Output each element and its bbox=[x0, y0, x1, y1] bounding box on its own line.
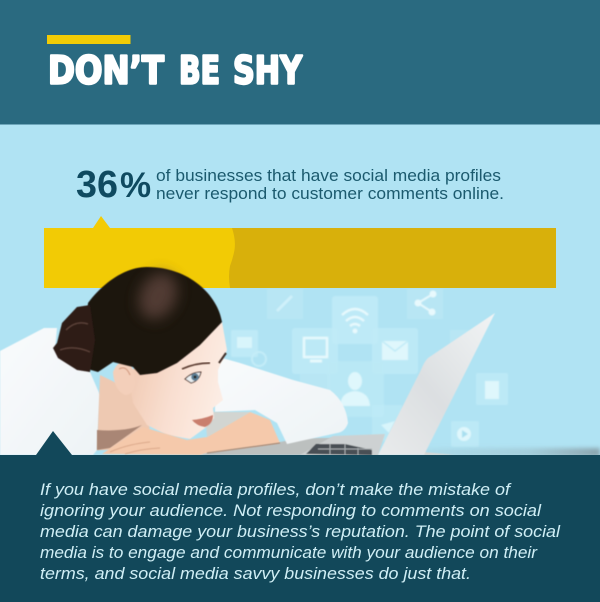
icon: monitor bbox=[292, 328, 338, 374]
icon: mail bbox=[372, 328, 418, 374]
title: BE bbox=[179, 48, 220, 92]
photo: laptop bbox=[300, 313, 495, 455]
stat description bbox=[156, 167, 504, 203]
accent bar bbox=[47, 35, 130, 44]
laptop keyboard bbox=[306, 444, 372, 455]
eye bbox=[185, 353, 226, 383]
body text: terms, and social media savvy businesses do just that. bbox=[40, 565, 471, 583]
icon: person bbox=[327, 361, 384, 417]
body text: ignoring your audience. Not responding to comments on social bbox=[40, 502, 542, 520]
bar fill 36% bbox=[44, 216, 235, 288]
laptop screen bbox=[378, 313, 495, 455]
body text: media is to engage and communicate with your audience on their bbox=[40, 544, 539, 562]
icon: chat bbox=[231, 330, 266, 366]
lips bbox=[192, 415, 213, 427]
shirt right sleeve bbox=[215, 356, 348, 444]
photo: table surface bbox=[200, 438, 600, 457]
icon: play bbox=[451, 421, 479, 447]
icon: twitter tile bbox=[372, 405, 402, 441]
social media icons background bbox=[231, 289, 508, 447]
progress bar bbox=[44, 216, 556, 288]
title: SHY bbox=[233, 48, 302, 92]
neck bbox=[97, 375, 150, 450]
bottom panel bbox=[0, 431, 600, 602]
body text bbox=[40, 481, 561, 583]
stat description: of businesses that have social media profiles bbox=[156, 167, 501, 185]
arm and hand bbox=[102, 412, 280, 455]
body text: If you have social media profiles, don’t make the mistake of bbox=[40, 481, 513, 499]
icon: document bbox=[476, 373, 508, 405]
table between chin and arm bbox=[205, 412, 250, 437]
body text: media can damage your business’s reputation. The point of social bbox=[40, 523, 561, 541]
title: DON’T bbox=[48, 48, 164, 92]
hair bun bbox=[53, 305, 95, 372]
bar track bbox=[44, 228, 556, 288]
icon: share bbox=[407, 289, 443, 319]
hair shine bbox=[132, 267, 184, 325]
title bbox=[48, 48, 302, 92]
eyebrow bbox=[182, 363, 210, 369]
photo: woman bbox=[0, 267, 348, 455]
header panel bbox=[0, 0, 600, 124]
hair bbox=[84, 267, 222, 375]
shirt body bbox=[0, 328, 100, 455]
stat text bbox=[76, 164, 504, 206]
face bbox=[128, 322, 227, 439]
icon: wifi bbox=[332, 296, 378, 344]
stat description: never respond to customer comments online. bbox=[156, 185, 504, 203]
ear bbox=[113, 361, 135, 395]
stat number 36%: 36% bbox=[76, 164, 151, 206]
chest shadow bbox=[97, 425, 142, 450]
pointer bbox=[36, 431, 72, 455]
